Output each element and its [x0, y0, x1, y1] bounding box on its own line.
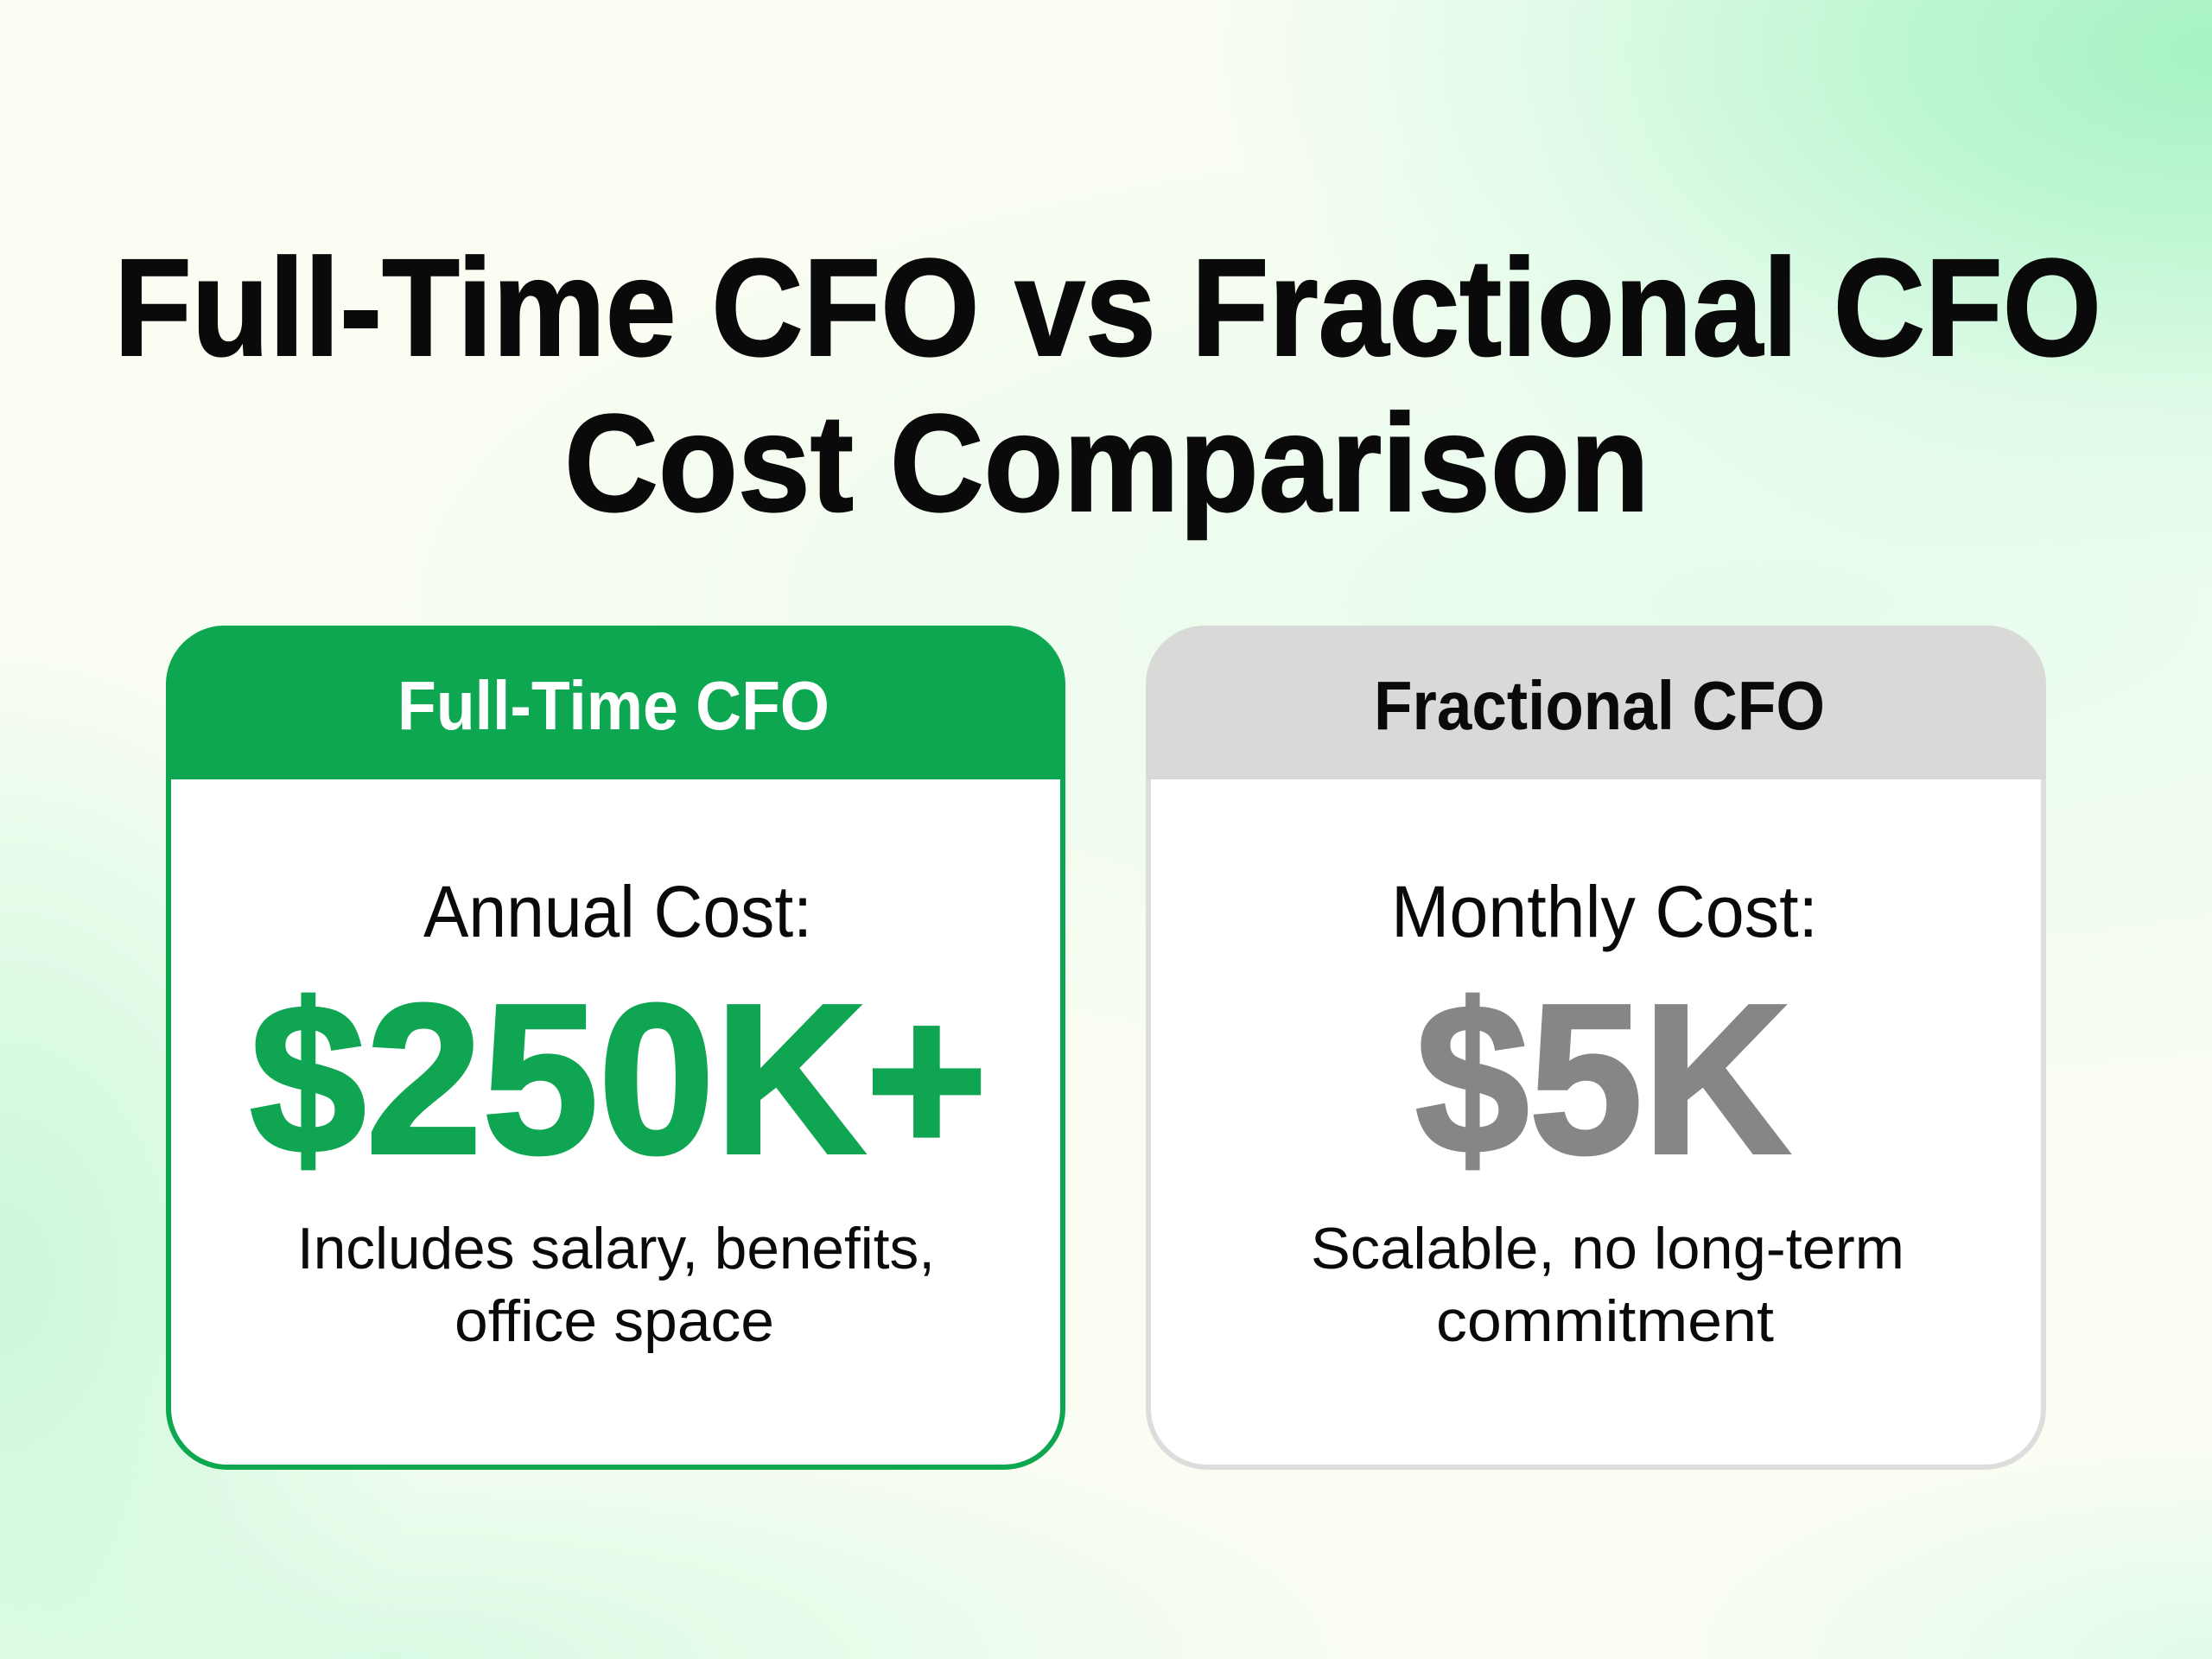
card outline: Full-Time CFO: [168, 628, 1063, 1467]
big number: $5K: $5K: [1415, 960, 1790, 1198]
card header: Full-Time CFO: [166, 626, 1065, 779]
header label: Full-Time CFO: Full-Time CFO: [397, 667, 830, 744]
title: [114, 230, 2101, 540]
cost label: annual: Annual Cost:: [423, 871, 812, 952]
card outline: Fractional CFO: [1148, 628, 2044, 1467]
description: fractional: commitment: [1436, 1288, 1774, 1354]
cost label: monthly: Monthly Cost:: [1391, 871, 1818, 952]
header label: Fractional CFO: Fractional CFO: [1374, 667, 1825, 744]
description: fractional: [1311, 1216, 1904, 1354]
description: full-time: Includes salary, benefits,: [297, 1216, 935, 1281]
title: Cost Comparison: [564, 385, 1649, 540]
description: full-time: office space: [454, 1288, 774, 1354]
card header: Fractional CFO: [1146, 626, 2046, 779]
panel: Full-Time CFO: [166, 626, 1065, 1467]
panel: Fractional CFO: [1146, 626, 2046, 1467]
big number: $250K+: $250K+: [250, 960, 988, 1198]
description: fractional: Scalable, no long-term: [1311, 1216, 1904, 1281]
description: full-time: [297, 1216, 935, 1354]
